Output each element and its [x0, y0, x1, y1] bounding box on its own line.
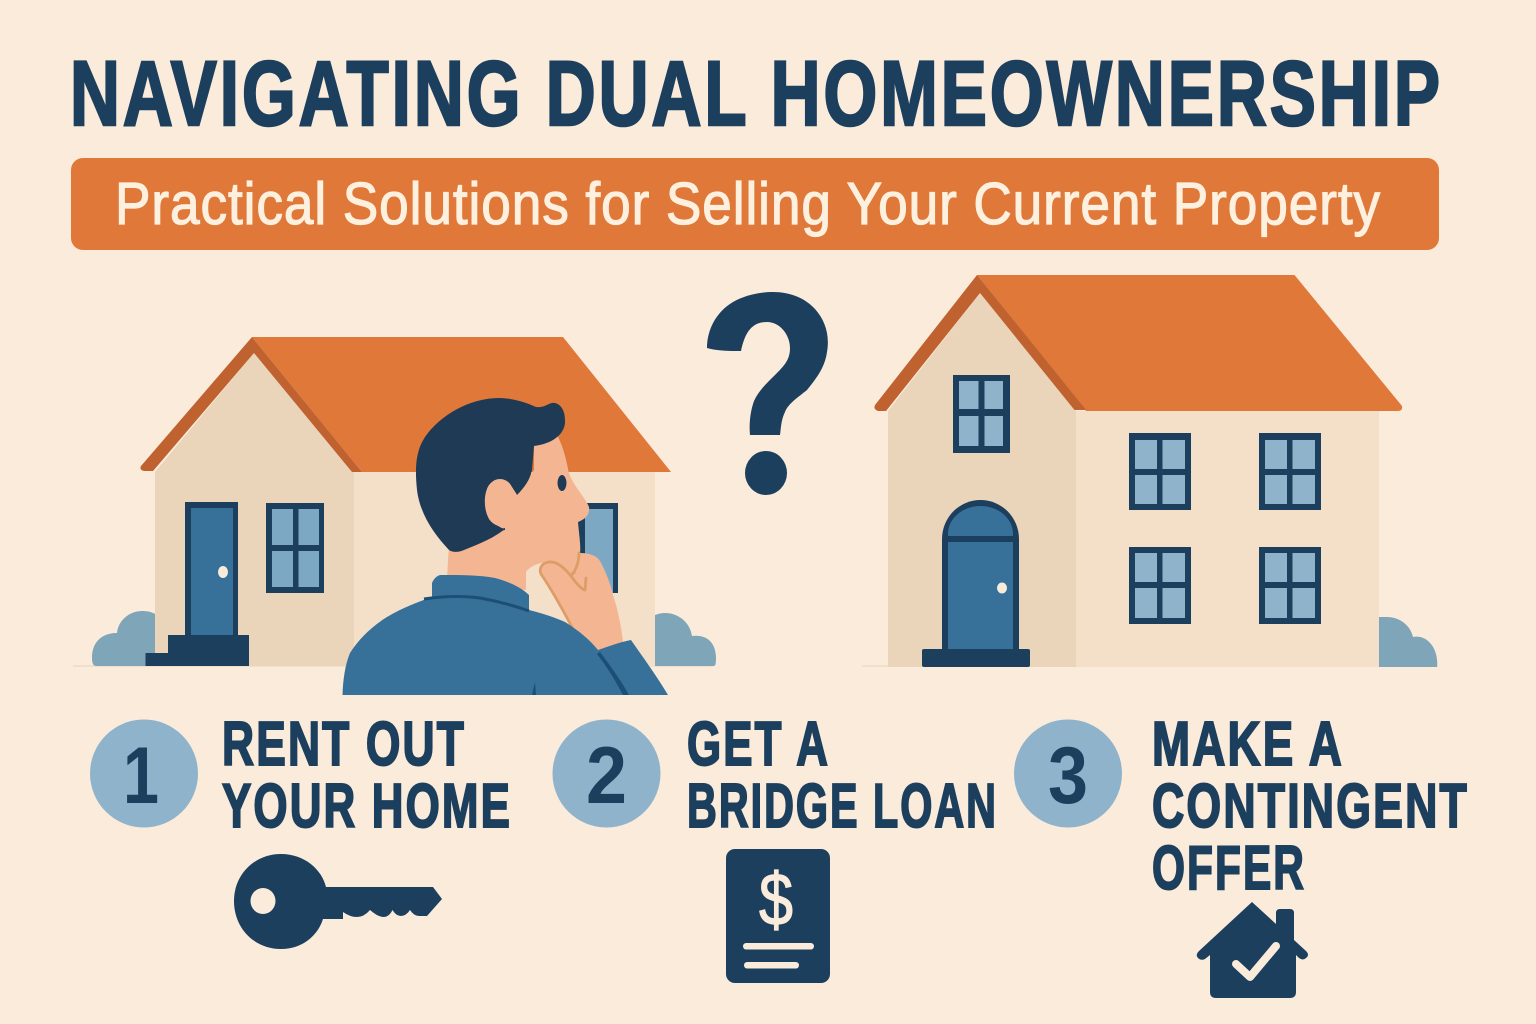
right bush [655, 613, 716, 666]
subtitle banner: Practical Solutions for Selling Your Current Property [115, 171, 1381, 237]
roof gable edge [140, 337, 362, 472]
door [185, 502, 238, 636]
attic window [953, 375, 1010, 453]
step 1 label [222, 710, 512, 841]
illustration: larger two-storey house [874, 275, 1437, 667]
bush [1379, 617, 1437, 667]
sleeve seam [597, 652, 629, 695]
step 2 [552, 710, 998, 983]
number badge 1: 1 [123, 731, 159, 821]
step 2 label [687, 710, 998, 841]
icon: question mark [707, 292, 828, 495]
shirt [342, 575, 668, 695]
step 2 label: GET A [687, 710, 830, 779]
arched door [942, 500, 1019, 650]
icon: key [234, 854, 442, 949]
window [266, 503, 324, 593]
door steps [146, 635, 249, 666]
step 3 [1014, 710, 1469, 998]
finger outline [540, 553, 586, 629]
step 1 label: YOUR HOME [222, 772, 512, 841]
ground line right [862, 665, 1438, 667]
collar seam [424, 597, 529, 611]
ear [485, 479, 520, 528]
roof [977, 275, 1402, 411]
roof [252, 337, 671, 472]
icon: loan document: $ [759, 858, 793, 941]
subtitle banner [71, 158, 1439, 250]
upper right window [1259, 433, 1321, 510]
left bush [92, 611, 155, 666]
number badge 1 [90, 720, 198, 828]
upper left window [1129, 433, 1191, 510]
step 3 label: MAKE A [1152, 710, 1344, 779]
lower left window [1129, 547, 1191, 624]
house walls [888, 293, 1076, 667]
roof gable edge [874, 275, 1086, 411]
step 3 label [1152, 710, 1469, 903]
house walls [155, 353, 354, 666]
number badge 3 [1014, 720, 1122, 828]
neck and face [447, 435, 589, 590]
eye [558, 475, 566, 491]
lower right window [1259, 547, 1321, 624]
illustration: current smaller house [92, 337, 716, 666]
step 2 label: BRIDGE LOAN [687, 772, 998, 841]
step 1 [90, 710, 512, 949]
ear shadow [493, 525, 505, 530]
hair [416, 398, 565, 552]
number badge 3: 3 [1048, 731, 1088, 821]
illustration: thinking person [342, 398, 668, 695]
number badge 2 [552, 720, 660, 828]
step 3 label: OFFER [1152, 834, 1306, 903]
window behind person [570, 503, 618, 593]
number badge 2: 2 [586, 731, 627, 821]
icon: house with check [1197, 902, 1308, 998]
door step [922, 649, 1030, 667]
icon: loan document [726, 849, 830, 983]
ground line left [73, 665, 713, 667]
shirt crease [532, 682, 536, 695]
step 1 label: RENT OUT [222, 710, 466, 779]
hand [541, 553, 623, 656]
